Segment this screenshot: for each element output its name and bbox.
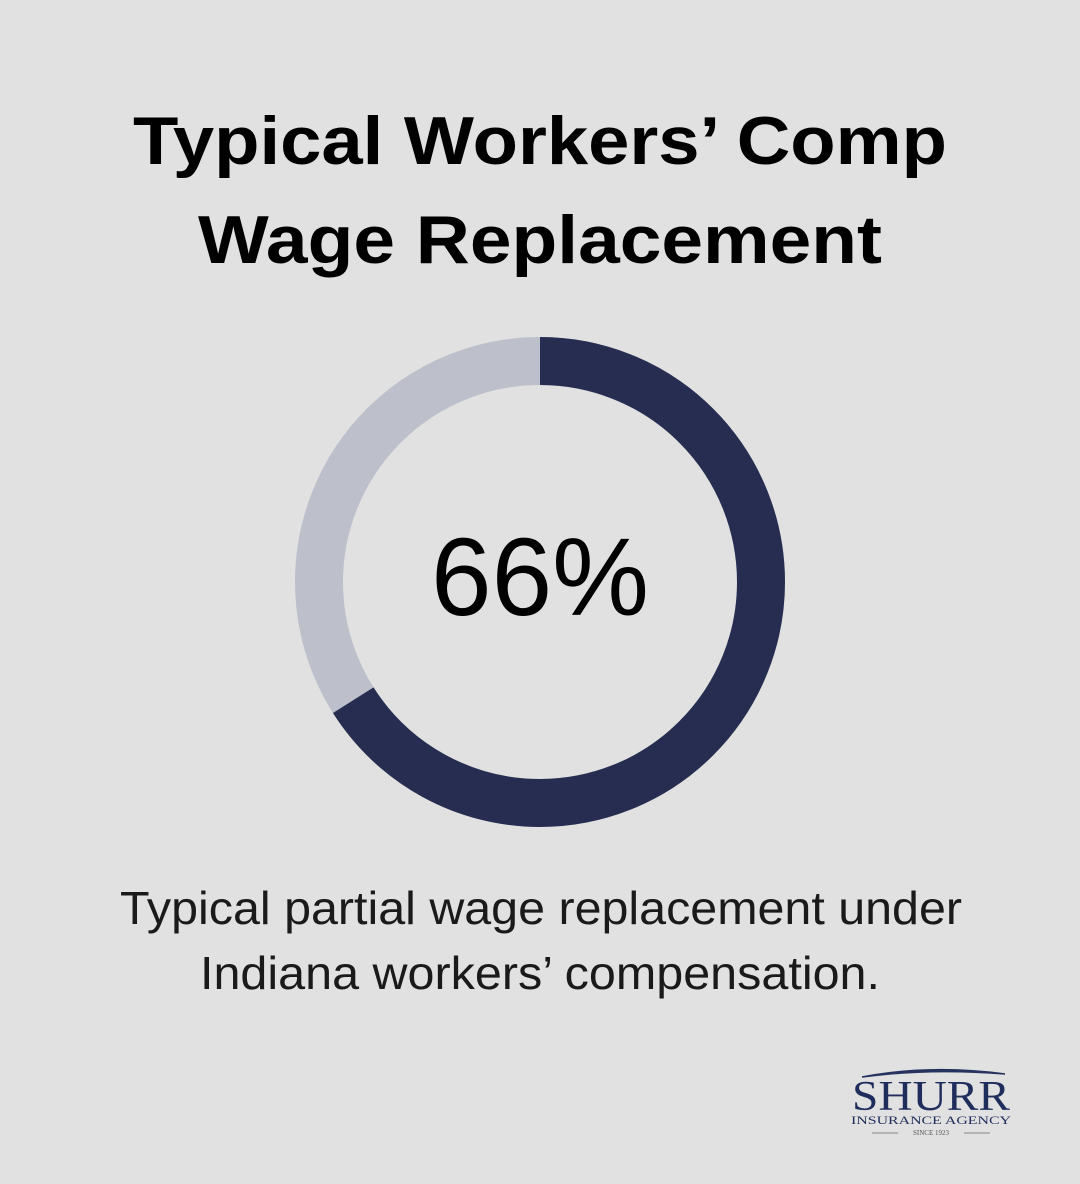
logo: SHURR bbox=[852, 1074, 1010, 1120]
title bbox=[133, 103, 947, 278]
caption bbox=[120, 882, 962, 999]
logo: INSURANCE AGENCY bbox=[851, 1113, 1011, 1127]
caption: Typical partial wage replacement under bbox=[120, 882, 962, 934]
title: Wage Replacement bbox=[198, 202, 882, 278]
title: Typical Workers’ Comp bbox=[133, 103, 947, 179]
donut chart bbox=[319, 361, 761, 803]
logo bbox=[851, 1070, 1011, 1137]
logo: SINCE 1923 bbox=[913, 1129, 949, 1137]
value label: 66% bbox=[431, 516, 649, 639]
caption: Indiana workers’ compensation. bbox=[200, 947, 880, 999]
